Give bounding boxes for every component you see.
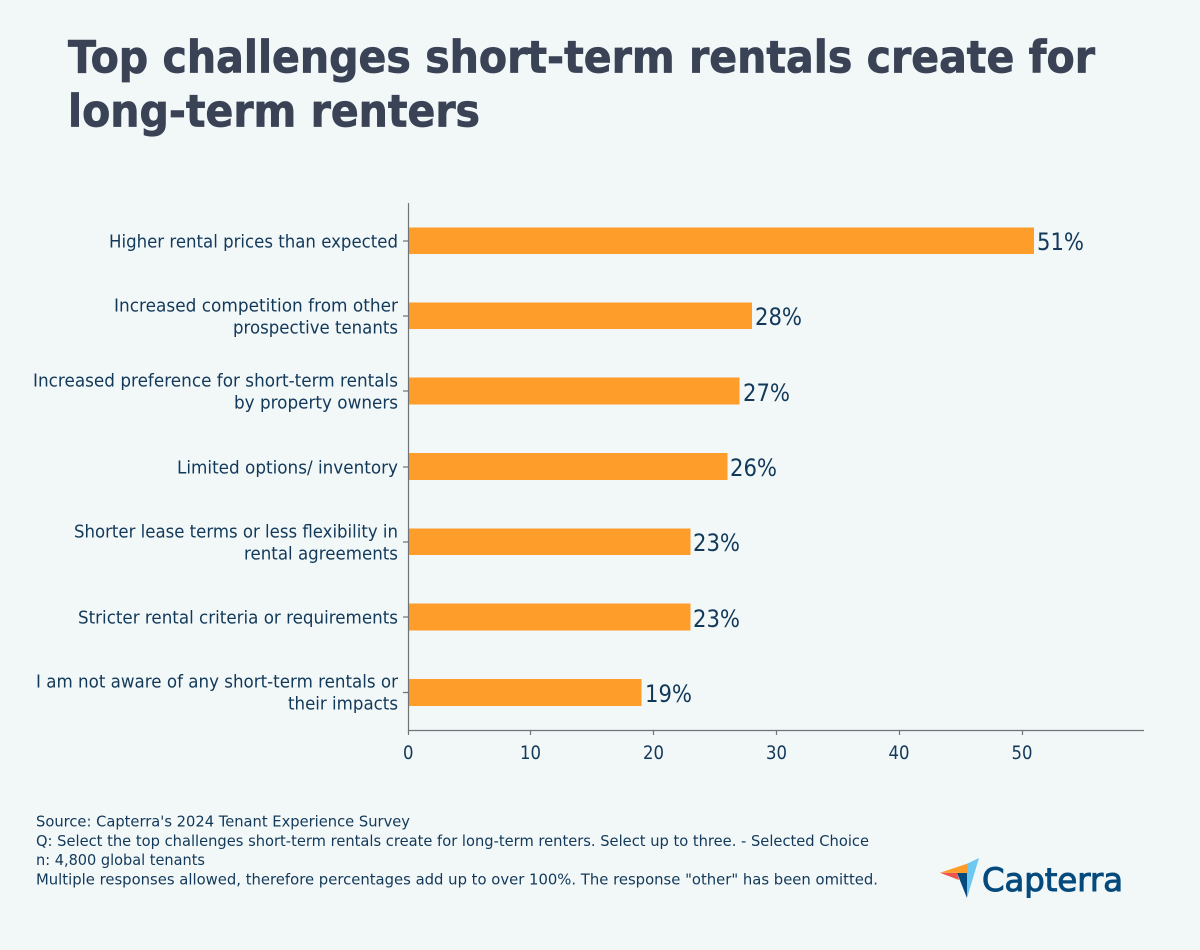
- category labels: Stricter rental criteria or requirements: [78, 608, 398, 628]
- x-axis labels: 40: [888, 743, 910, 764]
- value labels: 23%: [693, 605, 740, 633]
- value labels: [645, 228, 1084, 708]
- value labels: 26%: [730, 454, 777, 482]
- value labels: 23%: [693, 529, 740, 557]
- category labels: by property owners: [234, 394, 398, 414]
- category labels: their impacts: [288, 694, 398, 714]
- title: long-term renters: [68, 86, 480, 138]
- category labels: rental agreements: [244, 544, 398, 564]
- x-axis labels: 10: [520, 743, 541, 764]
- category labels: Higher rental prices than expected: [109, 232, 398, 252]
- category labels: Increased competition from other: [114, 296, 399, 316]
- source notes: Source: Capterra's 2024 Tenant Experience Survey: [36, 812, 410, 830]
- x-axis labels: [403, 743, 1032, 764]
- category labels: Increased preference for short-term rentals: [33, 372, 398, 392]
- category labels: Shorter lease terms or less flexibility in: [74, 522, 398, 542]
- source notes: [36, 812, 878, 888]
- x-axis labels: 30: [766, 743, 787, 764]
- value labels: 27%: [743, 379, 790, 407]
- source notes: Multiple responses allowed, therefore percentages add up to over 100%. The response "other" has been omitted.: [36, 870, 878, 888]
- icon: Capterra arrow: [940, 858, 979, 898]
- axes and ticks: [403, 203, 1144, 735]
- x-axis labels: 20: [643, 743, 664, 764]
- category labels: Limited options/ inventory: [177, 458, 398, 478]
- category labels: [33, 232, 399, 714]
- source notes: n: 4,800 global tenants: [36, 851, 205, 869]
- title: Top challenges short-term rentals create for: [68, 32, 1095, 84]
- bar chart: [33, 203, 1144, 764]
- category labels: I am not aware of any short-term rentals or: [36, 672, 399, 692]
- title: [68, 32, 1095, 138]
- value labels: 51%: [1037, 228, 1084, 256]
- Capterra logo: [940, 858, 1123, 899]
- wordmark: Capterra: [982, 861, 1123, 899]
- bars: [408, 228, 1034, 706]
- x-axis labels: 50: [1012, 743, 1032, 764]
- value labels: 28%: [755, 303, 802, 331]
- source notes: Q: Select the top challenges short-term rentals create for long-term renters. Select up to three. - Selected Choice: [36, 832, 869, 850]
- category labels: prospective tenants: [233, 318, 398, 338]
- value labels: 19%: [645, 680, 692, 708]
- x-axis labels: 0: [403, 743, 414, 764]
